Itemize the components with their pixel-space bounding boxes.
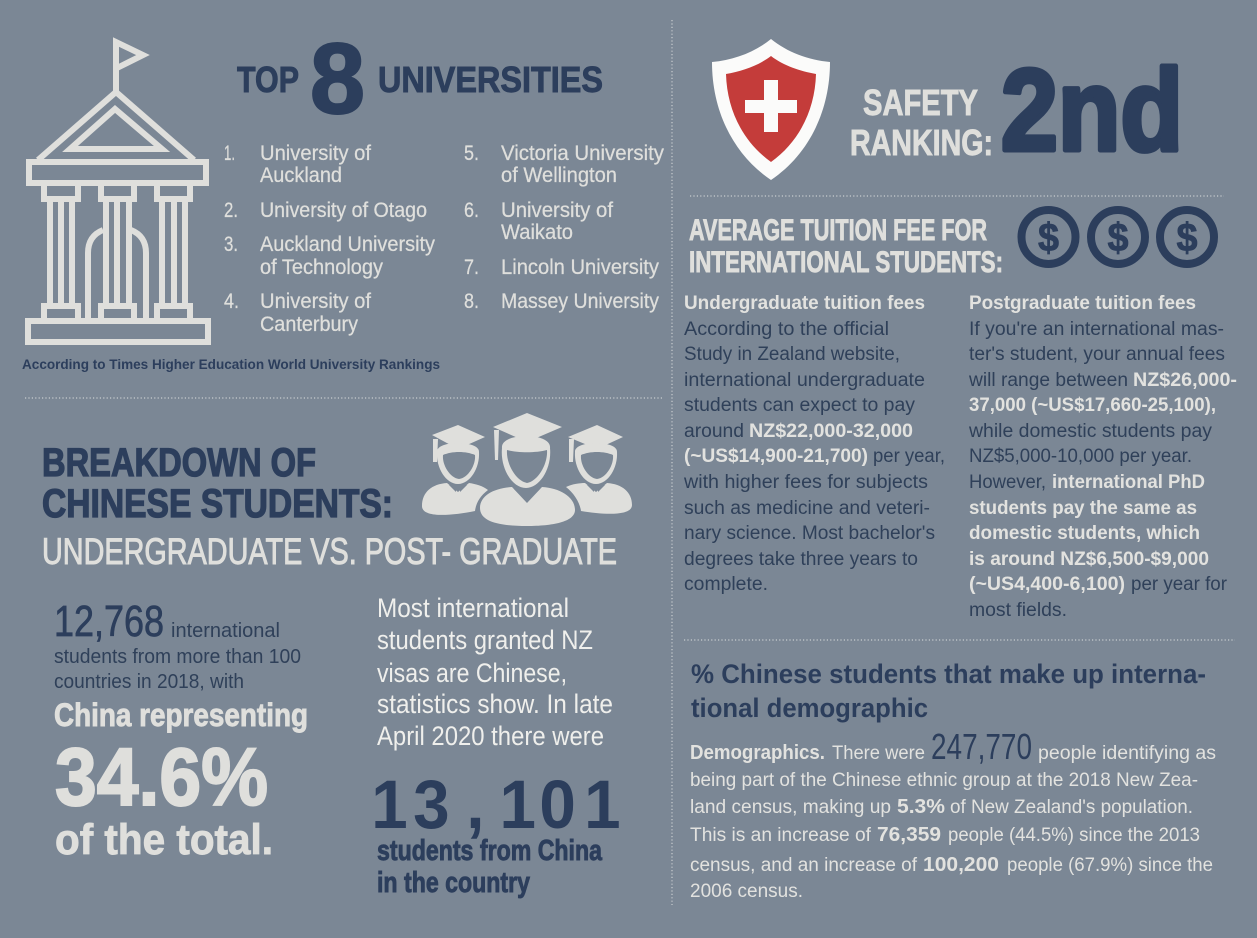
heading: top 8 universities: UNIVERSITIES <box>378 59 603 100</box>
panel: Chinese share of international demographic <box>690 659 1216 902</box>
heading: average tuition fee: INTERNATIONAL STUDENTS: <box>689 246 1003 279</box>
text block: demographics: 76,359 <box>877 824 941 846</box>
text block: demographics: 2006 census. <box>690 881 803 902</box>
text block: postgraduate tuition fees: NZ$26,000- <box>1133 370 1237 391</box>
university list: ranks 1 to 4: of Technology <box>260 256 383 279</box>
text block: most international students: Most international <box>377 593 569 623</box>
stat: 13,101 students from China: students from China <box>377 835 603 867</box>
label: safety ranking <box>850 82 993 163</box>
heading: average tuition fee: AVERAGE TUITION FEE FOR <box>689 214 987 247</box>
text block: demographics: Demographics. <box>690 742 825 764</box>
text block: demographics: This is an increase of <box>690 825 872 846</box>
university list: ranks 5 to 8 <box>464 142 664 313</box>
text block: postgraduate tuition fees: most fields. <box>969 600 1067 621</box>
text block: demographics: 5.3% <box>897 796 945 818</box>
heading: breakdown of Chinese students <box>42 441 393 526</box>
text block: undergraduate tuition fees: international undergraduate <box>684 370 925 391</box>
text block: undergraduate tuition fees: NZ$22,000-32,000 <box>749 421 913 442</box>
text block: demographics: people identifying as <box>1038 743 1216 764</box>
university list: ranks 1 to 4: University of Otago <box>260 199 427 222</box>
icon: university building <box>28 42 208 342</box>
panel: safety ranking <box>712 39 1183 180</box>
text block: demographics: of New Zealand's population. <box>950 797 1193 818</box>
university list: ranks 1 to 4: 4. <box>224 290 239 313</box>
stat: China representing 34.6%: of the total. <box>55 816 273 864</box>
label: safety ranking: RANKING: <box>850 122 993 163</box>
heading: top 8 universities <box>237 23 603 135</box>
text block: demographics: 100,200 <box>923 854 999 876</box>
heading: percent Chinese students <box>691 659 1206 723</box>
heading: top 8 universities: TOP <box>237 59 299 100</box>
text block: undergraduate tuition fees <box>683 293 945 595</box>
text block: demographics: being part of the Chinese ethnic group at the 2018 New Zea- <box>690 770 1198 791</box>
university list: ranks 5 to 8: 6. <box>464 199 479 222</box>
stat: 13,101 students from China <box>371 766 621 899</box>
source note: According to Times Higher Education World University Rankings <box>22 356 440 372</box>
text block: postgraduate tuition fees: is around NZ$6,500-$9,000 <box>969 549 1209 570</box>
heading: percent Chinese students: tional demographic <box>691 693 928 723</box>
heading: percent Chinese students: % Chinese students that make up interna- <box>691 659 1206 689</box>
stat: 12,768 international students: countries in 2018, with <box>54 671 244 693</box>
text block: undergraduate tuition fees: According to the official <box>684 319 889 340</box>
text block: postgraduate tuition fees: (~US4,400-6,100) <box>969 574 1125 595</box>
stat: 13,101 students from China: in the country <box>377 867 530 899</box>
text block: demographics: people (44.5%) since the 2013 <box>948 825 1200 846</box>
text block: undergraduate tuition fees: degrees take three years to <box>684 549 918 570</box>
university list: ranks 1 to 4: University of <box>260 142 371 165</box>
heading: average tuition fee <box>689 214 1003 279</box>
university list: ranks 5 to 8: University of <box>501 199 613 222</box>
text block: postgraduate tuition fees: students pay the same as <box>969 498 1197 519</box>
heading: top 8 universities: 8 <box>310 23 365 135</box>
text block: most international students: April 2020 there were <box>377 721 604 751</box>
text block: demographics: 247,770 <box>931 726 1032 767</box>
stat: 13,101 students from China: 13,101 <box>371 766 621 843</box>
stat: 12,768 international students: international <box>171 620 280 642</box>
university list: ranks 1 to 4: University of <box>260 290 371 313</box>
icon: three dollar coins: $ <box>1108 216 1128 260</box>
icon: three graduates <box>422 413 632 526</box>
text block: most international students <box>377 593 613 751</box>
text block: postgraduate tuition fees: However, <box>969 472 1046 493</box>
text block: undergraduate tuition fees: per year, <box>873 446 945 467</box>
text block: demographics: people (67.9%) since the <box>1007 855 1213 876</box>
text block: postgraduate tuition fees: international PhD <box>1052 472 1205 493</box>
heading: breakdown of Chinese students: CHINESE STUDENTS: <box>42 482 393 526</box>
university list: ranks 1 to 4: Canterbury <box>260 313 358 336</box>
icon: three dollar coins: $ <box>1038 216 1059 260</box>
text block: undergraduate tuition fees: around <box>684 421 744 442</box>
text block: undergraduate tuition fees: Study in Zealand website, <box>684 344 900 365</box>
stat: China representing 34.6% <box>54 697 308 864</box>
text block: undergraduate tuition fees: with higher fees for subjects <box>683 472 928 493</box>
stat: China representing 34.6%: 34.6% <box>55 732 268 823</box>
text block: postgraduate tuition fees: per year for <box>1131 574 1228 595</box>
label: safety ranking: SAFETY <box>863 82 978 123</box>
text block: demographics: land census, making up <box>690 797 891 818</box>
university list: ranks 5 to 8: of Wellington <box>501 164 617 187</box>
text block: most international students: visas are Chinese, <box>377 658 567 688</box>
university list: ranks 5 to 8: Massey University <box>501 290 659 313</box>
university list: ranks 5 to 8: 8. <box>464 290 479 313</box>
icon: three dollar coins <box>1022 210 1214 264</box>
text block: postgraduate tuition fees: NZ$5,000-10,000 per year. <box>969 446 1192 467</box>
stat: China representing 34.6%: China representing <box>54 697 308 733</box>
stat: 12,768 international students: 12,768 <box>54 597 164 646</box>
heading: breakdown of Chinese students: BREAKDOWN OF <box>42 441 316 485</box>
text block: most international students: students granted NZ <box>377 625 593 655</box>
value: 2nd: 2nd <box>1001 45 1183 175</box>
university list: ranks 1 to 4: 1. <box>224 142 235 165</box>
university list: ranks 5 to 8: 7. <box>464 256 479 279</box>
text block: postgraduate tuition fees: while domestic students pay <box>968 421 1213 442</box>
text block: demographics: There were <box>832 743 925 764</box>
text block: postgraduate tuition fees: Postgraduate tuition fees <box>969 293 1196 314</box>
university list: ranks 1 to 4 <box>224 142 435 336</box>
university list: ranks 5 to 8: Waikato <box>501 221 573 244</box>
stat: 12,768 international students: students from more than 100 <box>54 646 301 668</box>
text block: undergraduate tuition fees: such as medicine and veteri- <box>684 498 930 519</box>
university list: ranks 1 to 4: Auckland University <box>260 233 435 256</box>
panel: top universities <box>22 23 664 372</box>
text block: undergraduate tuition fees: (~US$14,900-21,700) <box>684 446 868 467</box>
text block: demographics <box>690 726 1216 902</box>
stat: 12,768 international students <box>54 597 301 693</box>
text block: postgraduate tuition fees: will range between <box>968 370 1128 391</box>
text block: postgraduate tuition fees <box>968 293 1237 621</box>
text block: undergraduate tuition fees: students can expect to pay <box>684 395 915 416</box>
text block: postgraduate tuition fees: domestic students, which <box>969 523 1200 544</box>
university list: ranks 1 to 4: 2. <box>224 199 238 222</box>
text block: most international students: statistics show. In late <box>377 689 613 719</box>
university list: ranks 5 to 8: 5. <box>464 142 479 165</box>
subheading: undergraduate vs post-graduate: UNDERGRADUATE VS. POST- GRADUATE <box>42 531 617 572</box>
university list: ranks 1 to 4: Auckland <box>260 164 342 187</box>
panel: breakdown of Chinese students <box>42 413 632 899</box>
text block: postgraduate tuition fees: If you're an international mas- <box>969 319 1224 340</box>
text block: demographics: census, and an increase of <box>690 855 918 876</box>
icon: three dollar coins: $ <box>1176 216 1198 260</box>
text block: undergraduate tuition fees: Undergraduate tuition fees <box>684 293 925 314</box>
text block: undergraduate tuition fees: nary science. Most bachelor's <box>684 523 935 544</box>
university list: ranks 5 to 8: Victoria University <box>501 142 664 165</box>
text block: postgraduate tuition fees: 37,000 (~US$17,660-25,100), <box>969 395 1216 416</box>
text block: undergraduate tuition fees: complete. <box>684 574 768 595</box>
panel: average tuition fee <box>683 210 1237 621</box>
university list: ranks 1 to 4: 3. <box>224 233 238 256</box>
icon: shield with cross <box>712 39 830 180</box>
text block: postgraduate tuition fees: ter's student, your annual fees <box>969 344 1225 365</box>
university list: ranks 5 to 8: Lincoln University <box>501 256 659 279</box>
